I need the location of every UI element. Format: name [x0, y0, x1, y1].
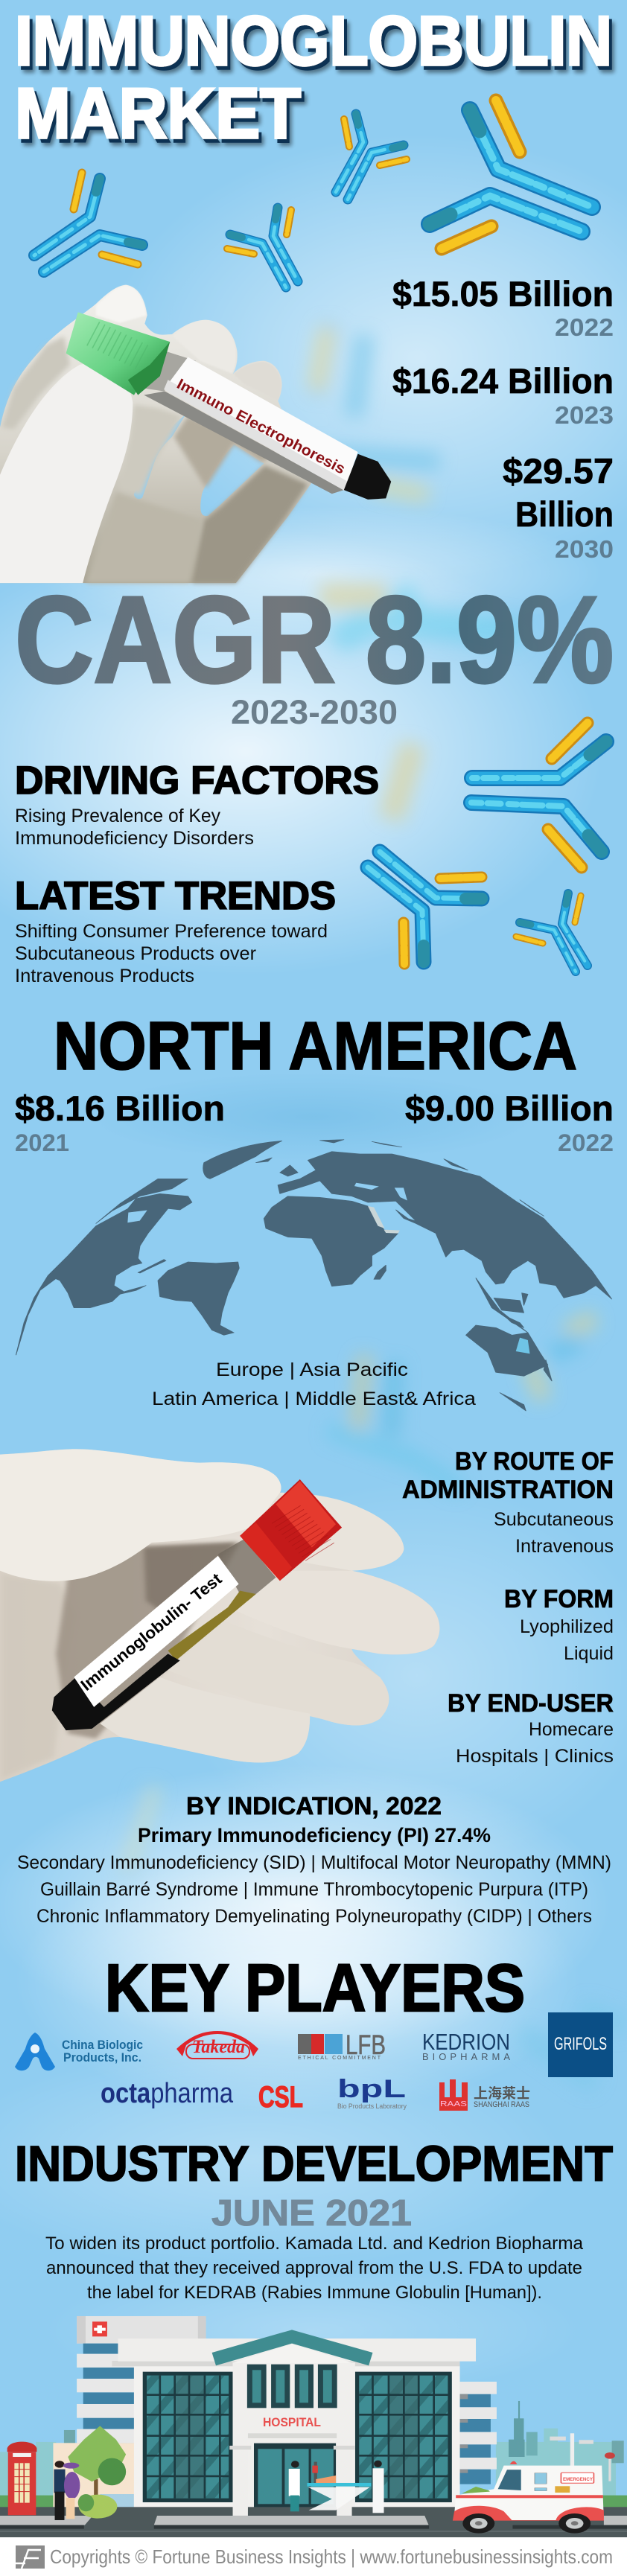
skyline: [0, 2401, 624, 2496]
by route of administration: Subcutaneous: [494, 1509, 614, 1530]
windows: [143, 2372, 452, 2502]
market values: 2022: [555, 313, 614, 341]
market values: 2023: [555, 401, 614, 429]
regions text: Europe | Asia Pacific: [216, 1359, 408, 1380]
by end-user: [448, 1689, 614, 1767]
driving factors: Immunodeficiency Disorders: [15, 828, 254, 849]
north america heading: $8.16 Billion: [15, 1088, 225, 1128]
by end-user: Homecare: [529, 1719, 614, 1740]
logo: LFB: ETHICAL COMMITMENT: [298, 2056, 381, 2061]
by indication: Guillain Barré Syndrome | Immune Thrombocytopenic Purpura (ITP): [40, 1879, 588, 1900]
logo: shanghai raas: RAAS: [440, 2100, 467, 2108]
door: [254, 2443, 336, 2508]
icon: antibody centre: [227, 208, 298, 287]
tube label: Immunoglobulin- Test: [77, 1569, 226, 1695]
people: [54, 2461, 80, 2520]
north america heading: [15, 1009, 614, 1156]
icon: antibody large top right: [430, 101, 592, 249]
road and sidewalks: [0, 2507, 627, 2537]
north america heading: 2022: [558, 1129, 614, 1156]
by form: [504, 1585, 614, 1664]
north america heading: 2021: [15, 1129, 69, 1156]
blurred background antibodies: [127, 324, 626, 2085]
ambulance sign: EMERGENCY: [563, 2478, 593, 2482]
phone booth: [7, 2442, 36, 2515]
columns: [229, 2446, 355, 2516]
by indication: [17, 1792, 611, 1927]
by route of administration: [402, 1447, 614, 1557]
logo: takeda: [176, 2031, 258, 2059]
logo: china biologic: Products, Inc.: [63, 2050, 141, 2065]
logo: shanghai raas: [439, 2079, 530, 2111]
by indication: BY INDICATION, 2022: [186, 1792, 442, 1820]
photo: gloved hand holding green tube: [0, 285, 391, 583]
latest trends: Shifting Consumer Preference toward: [15, 921, 328, 942]
logo: takeda: Takeda: [192, 2037, 245, 2057]
industry development heading: JUNE 2021: [211, 2193, 412, 2234]
latest trends: Intravenous Products: [15, 966, 194, 986]
logo: CSL: CSL: [258, 2081, 303, 2114]
tube label: Immuno Electrophoresis: [174, 376, 348, 478]
icon: antibody right of driving factors: [471, 723, 606, 867]
regions text: Latin America | Middle East& Africa: [152, 1389, 476, 1409]
logo: kedrion: KEDRION: [422, 2029, 510, 2055]
driving factors: [15, 759, 379, 849]
footer: [0, 2537, 627, 2576]
by end-user: Hospitals | Clinics: [456, 1746, 614, 1767]
market values: $29.57: [503, 451, 614, 491]
by route of administration: ADMINISTRATION: [402, 1476, 614, 1504]
market values: $15.05 Billion: [392, 274, 614, 313]
by route of administration: BY ROUTE OF: [455, 1447, 614, 1476]
icon: small antibody: [516, 893, 588, 972]
logo: kedrion: [422, 2029, 510, 2062]
logo: LFB: LFB: [346, 2030, 386, 2060]
by form: BY FORM: [504, 1585, 614, 1613]
industry development text: [45, 2234, 584, 2303]
by indication: Secondary Immunodeficiency (SID) | Multifocal Motor Neuropathy (MMN): [17, 1852, 611, 1873]
by route of administration: Intravenous: [515, 1536, 614, 1557]
logo: china biologic: [15, 2033, 143, 2070]
industry development heading: [15, 2136, 613, 2234]
logo: shanghai raas: SHANGHAI RAAS: [474, 2100, 529, 2109]
grass: [0, 2496, 627, 2516]
right tower: [460, 2382, 497, 2484]
tree: [68, 2426, 126, 2519]
market values: 2030: [555, 535, 614, 563]
latest trends: LATEST TRENDS: [15, 874, 336, 918]
back tower: [53, 2316, 206, 2508]
icon: antibody right of latest trends: [368, 852, 482, 964]
by indication: Primary Immunodeficiency (PI) 27.4%: [138, 1824, 491, 1846]
industry development text: the label for KEDRAB (Rabies Immune Globulin [Human]).: [87, 2283, 542, 2303]
industry development text: announced that they received approval from the U.S. FDA to update: [46, 2258, 582, 2278]
market values: $16.24 Billion: [392, 361, 614, 401]
icon: antibody left: [34, 173, 142, 272]
by form: Liquid: [564, 1643, 614, 1664]
logo: octapharma: octapharma: [101, 2078, 234, 2109]
medical staff and stretcher: [289, 2461, 384, 2513]
by end-user: BY END-USER: [448, 1689, 614, 1718]
logo: china biologic: China Biologic: [62, 2038, 143, 2052]
driving factors: DRIVING FACTORS: [15, 759, 379, 803]
market values: [392, 274, 614, 563]
key players heading: KEY PLAYERS: [105, 1951, 525, 2026]
logo: kedrion: BIOPHARMA: [422, 2051, 510, 2062]
title: MARKET: [15, 74, 301, 153]
by form: Lyophilized: [520, 1616, 614, 1637]
industry development text: To widen its product portfolio. Kamada Ltd. and Kedrion Biopharma: [45, 2234, 584, 2254]
driving factors: Rising Prevalence of Key: [15, 806, 220, 826]
logo: grifols: [548, 2012, 613, 2077]
hospital illustration: [0, 2316, 627, 2537]
logo: bpL: bpL: [337, 2075, 406, 2103]
latest trends: [15, 874, 336, 986]
north america heading: NORTH AMERICA: [54, 1009, 577, 1084]
latest trends: Subcutaneous Products over: [15, 943, 256, 964]
logo: LFB: [298, 2030, 386, 2061]
world map globe: [16, 1140, 612, 1411]
logo: bpL: Bio Products Laboratory: [337, 2102, 407, 2110]
CAGR: 2023-2030: [231, 693, 398, 731]
logo: shanghai raas: 上海莱士: [474, 2085, 530, 2102]
title: [15, 1, 612, 153]
portico: [212, 2330, 372, 2515]
by indication: Chronic Inflammatory Demyelinating Polyneuropathy (CIDP) | Others: [36, 1906, 592, 1927]
cctv pole: [550, 2433, 615, 2481]
icon: fortune business insights logo: [16, 2545, 45, 2569]
logo: bpL: [337, 2075, 407, 2110]
hospital sign: HOSPITAL: [263, 2415, 321, 2429]
regions text: [152, 1359, 476, 1409]
icon: antibody upper middle: [336, 114, 407, 200]
north america heading: $9.00 Billion: [405, 1088, 614, 1128]
main block: [112, 2339, 476, 2508]
market values: Billion: [515, 494, 614, 534]
photo: gloved hand holding test tube: [0, 1449, 439, 1782]
ambulance: [453, 2461, 604, 2534]
